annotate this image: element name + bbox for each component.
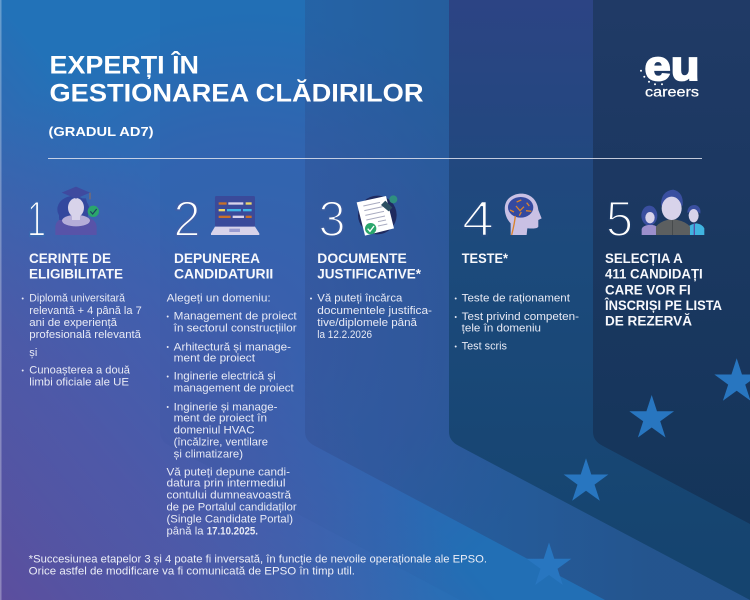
documents text: Vă puteți încărca (317, 293, 402, 305)
requirements list: și (29, 347, 37, 359)
heading: CARE VOR FI (605, 282, 691, 298)
footnote (29, 554, 487, 578)
logo: EU careers: careers (645, 84, 699, 100)
application instructions: datura prin intermediul (166, 478, 286, 490)
application instructions: 17.10.2025. (207, 526, 258, 538)
heading: DOCUMENTE (317, 251, 407, 266)
domain list: Inginerie și manage- (174, 401, 278, 413)
requirements list: limbi oficiale ale UE (29, 376, 129, 388)
panel: step 5 background (593, 0, 750, 524)
panel: step 2 background (160, 0, 750, 600)
requirements list (22, 293, 142, 388)
requirements list: Diplomă universitară (29, 293, 125, 305)
requirements list: Cunoașterea a două (29, 365, 130, 377)
application instructions: de pe Portalul candidaților (166, 502, 297, 514)
icon: graduate (55, 187, 99, 235)
panel: step 2 application (166, 191, 297, 538)
number 2: 2 (174, 191, 200, 247)
documents text (310, 293, 432, 341)
documents text: la 12.2.2026 (317, 329, 372, 341)
panel: step 3 background (305, 0, 750, 600)
heading: CANDIDATURII (174, 267, 273, 282)
heading: JUSTIFICATIVE* (317, 267, 422, 282)
heading: ÎNSCRIȘI PE LISTA (604, 298, 722, 313)
panel: step 1 eligibility (22, 187, 142, 388)
domain list: în sectorul construcțiilor (173, 323, 297, 335)
domain list: management de proiect (174, 383, 294, 395)
panel: step 3 documents (310, 191, 432, 341)
application instructions (166, 466, 297, 538)
subtitle: (GRADUL AD7) (48, 124, 154, 139)
logo: EU careers: eu (644, 42, 700, 89)
application instructions: Vă puteți depune candi- (166, 466, 290, 478)
number 3: 3 (318, 191, 346, 247)
footnote: Orice astfel de modificare va fi comunicată de EPSO în timp util. (29, 566, 355, 578)
heading: DE REZERVĂ (605, 314, 692, 328)
star (714, 358, 750, 401)
number 4: 4 (462, 191, 494, 247)
domain list: Arhitectură și manage- (174, 341, 291, 353)
domain list (167, 311, 297, 460)
domain list: (încălzire, ventilare (174, 436, 268, 448)
panel: step 4 background (449, 0, 750, 600)
heading (29, 251, 123, 282)
test list: țele în domeniu (462, 323, 541, 335)
domain list: și climatizare) (174, 448, 243, 460)
heading: ELIGIBILITATE (29, 267, 123, 282)
test list: Test scris (462, 341, 508, 353)
requirements list: ani de experiență (29, 317, 117, 329)
logo: EU careers (640, 42, 700, 100)
heading (174, 251, 273, 282)
star (564, 458, 608, 501)
domain intro: Alegeți un domeniu: (167, 293, 271, 305)
title: EXPERȚI ÎN (50, 49, 199, 79)
number 1: 1 (27, 191, 46, 247)
heading: SELECȚIA A (605, 251, 683, 266)
icon: document with stamp (357, 195, 397, 236)
domain list: Inginerie electrică și (174, 371, 276, 383)
icon: head with brain (505, 194, 542, 235)
application instructions: contului dumneavoastră (166, 490, 291, 502)
icon: laptop (211, 196, 259, 235)
heading: DEPUNEREA (174, 251, 260, 266)
test list: Test privind competen- (462, 311, 579, 323)
documents text: tive/diplomele până (317, 317, 417, 329)
heading (317, 251, 422, 282)
domain list: Management de proiect (174, 311, 297, 323)
heading: CERINȚE DE (29, 251, 111, 266)
number 5: 5 (606, 191, 633, 247)
heading: 411 CANDIDAȚI (605, 267, 703, 282)
domain list: ment de proiect (174, 353, 255, 365)
documents text: documentele justifica- (317, 305, 432, 317)
star (629, 395, 674, 438)
footnote: *Succesiunea etapelor 3 și 4 poate fi inversată, în funcție de nevoile operaționale ale EPSO. (29, 554, 487, 566)
stars (527, 358, 750, 585)
panel: step 5 selection (604, 190, 722, 328)
icon: three people (641, 190, 704, 235)
application instructions: (Single Candidate Portal) (166, 514, 293, 526)
title: GESTIONAREA CLĂDIRILOR (50, 79, 423, 108)
application instructions: până la (166, 526, 204, 538)
requirements list: profesională relevantă (29, 329, 141, 341)
heading: TESTE* (462, 251, 509, 266)
requirements list: relevantă + 4 până la 7 (29, 305, 142, 317)
title (50, 49, 423, 108)
heading (604, 251, 722, 328)
test list: Teste de raționament (462, 293, 570, 305)
domain list: domeniul HVAC (174, 425, 255, 437)
domain list: ment de proiect în (174, 413, 267, 425)
test list (455, 293, 579, 353)
star (527, 542, 571, 585)
panel: step 4 tests (455, 191, 579, 353)
